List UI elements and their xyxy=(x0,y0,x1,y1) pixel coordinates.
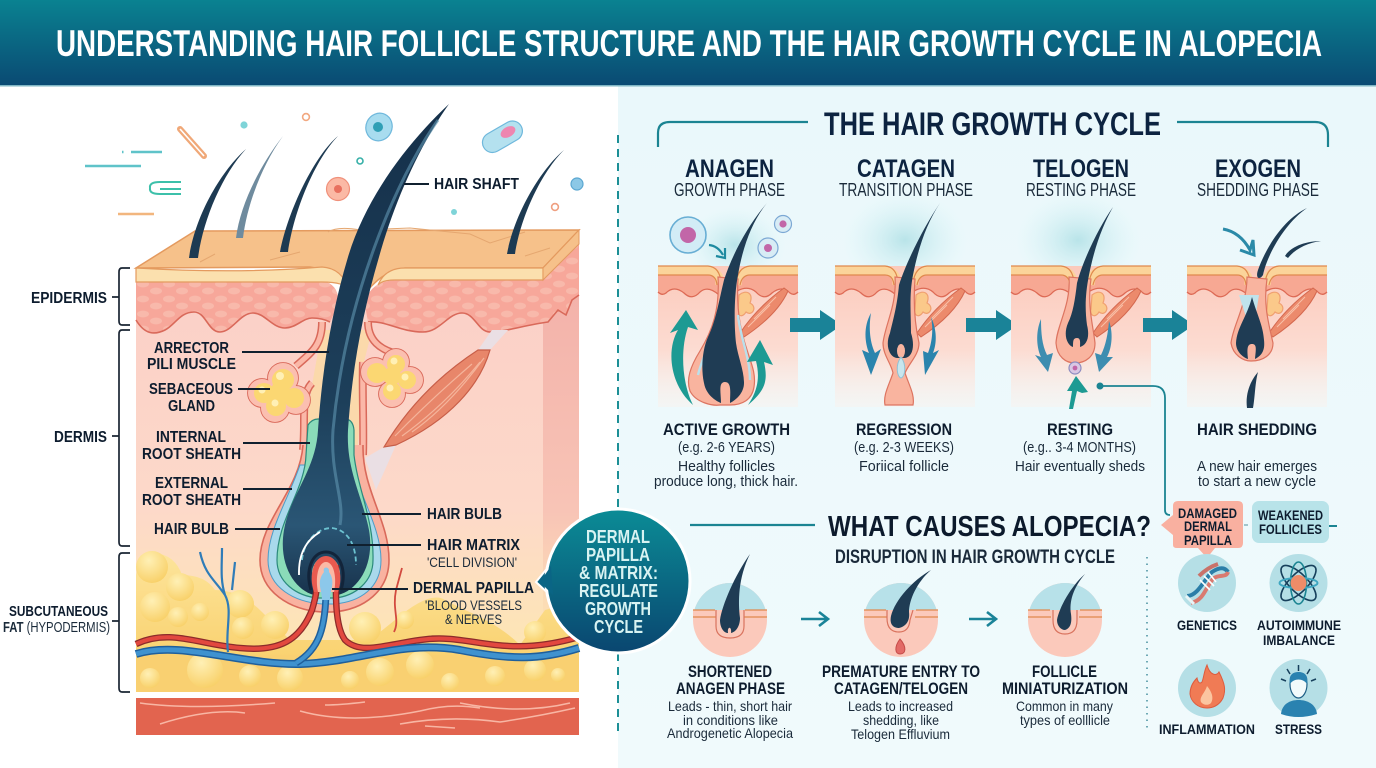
catagen caption xyxy=(854,420,954,475)
arrow: telogen to exogen xyxy=(1143,310,1194,340)
anagen skin diagram xyxy=(658,203,798,407)
caption: shedding, like xyxy=(863,712,939,728)
arrector pili muscle xyxy=(365,330,508,490)
callout: weakened follicles: WEAKENED xyxy=(1258,507,1323,523)
caption: CATAGEN/TELOGEN xyxy=(834,680,968,698)
anagen caption xyxy=(654,420,798,490)
callout: weakened follicles: FOLLICLES xyxy=(1259,521,1322,537)
label: sebaceous gland xyxy=(149,381,233,415)
follicle sheaths xyxy=(260,419,389,612)
caption: Common in many xyxy=(1016,698,1113,714)
exogen heading: SHEDDING PHASE xyxy=(1197,180,1319,200)
telogen heading xyxy=(1026,155,1136,200)
dermal papilla xyxy=(309,552,343,600)
callout: damaged dermal papilla: PAPILLA xyxy=(1184,532,1232,548)
catagen heading xyxy=(839,155,973,200)
main hair shaft and bulb xyxy=(283,104,449,595)
telogen caption: Hair eventually sheds xyxy=(1015,459,1145,475)
label xyxy=(1257,617,1341,648)
label: arrector pili muscle: ARRECTOR xyxy=(154,340,229,357)
blood vessels xyxy=(136,548,579,664)
label: internal root sheath: INTERNAL xyxy=(156,429,226,446)
label: internal root sheath: ROOT SHEATH xyxy=(142,446,241,463)
label: hair bulb right: HAIR BULB xyxy=(427,506,502,523)
label: sebaceous gland: SEBACEOUS xyxy=(149,381,233,398)
panel: hair follicle anatomy xyxy=(3,104,583,735)
catagen caption: REGRESSION xyxy=(856,420,952,439)
icon: miniaturized follicle xyxy=(1028,574,1102,657)
heading: what causes alopecia: WHAT CAUSES ALOPECIA? xyxy=(828,511,1151,543)
leader lines xyxy=(235,184,429,589)
arrow: anagen to catagen xyxy=(790,310,842,340)
factor: inflammation xyxy=(1159,659,1255,737)
telogen caption xyxy=(1015,420,1145,475)
anagen caption: Healthy follicles xyxy=(678,459,775,475)
catagen skin diagram xyxy=(835,203,975,407)
exogen heading: EXOGEN xyxy=(1215,155,1301,183)
factor: autoimmune imbalance xyxy=(1257,554,1341,648)
label: AUTOIMMUNE xyxy=(1257,617,1341,633)
caption: Telogen Effluvium xyxy=(851,726,950,742)
epidermis cell layer xyxy=(136,244,579,333)
label: STRESS xyxy=(1275,721,1322,737)
telogen caption: RESTING xyxy=(1047,420,1113,439)
callout: dermal papilla and matrix: REGULATE xyxy=(579,581,658,601)
caption: FOLLICLE xyxy=(1032,663,1097,681)
callout: dermal papilla and matrix xyxy=(536,509,690,653)
label: sebaceous gland: GLAND xyxy=(168,398,215,415)
phase: telogen xyxy=(1011,155,1151,475)
label: GENETICS xyxy=(1177,617,1237,633)
label: subcutaneous fat xyxy=(3,603,110,636)
icon: stressed person xyxy=(1270,659,1328,717)
caption: SHORTENED xyxy=(688,663,772,681)
telogen caption: (e.g.. 3-4 MONTHS) xyxy=(1023,439,1136,456)
catagen heading: TRANSITION PHASE xyxy=(839,180,973,200)
exogen caption: A new hair emerges xyxy=(1197,459,1317,475)
telogen skin diagram xyxy=(1011,207,1151,409)
callout: weakened follicles xyxy=(1252,501,1337,543)
label: subcutaneous fat: SUBCUTANEOUS xyxy=(9,603,108,620)
callout: dermal papilla and matrix: PAPILLA xyxy=(586,545,650,565)
factor: genetics xyxy=(1177,554,1237,633)
exogen caption: to start a new cycle xyxy=(1198,474,1316,490)
exogen heading xyxy=(1197,155,1319,200)
muscle base band xyxy=(136,698,579,735)
label: dermal papilla: DERMAL PAPILLA xyxy=(413,580,534,597)
icon: short hair follicle xyxy=(693,554,767,657)
title banner xyxy=(0,0,1376,86)
telogen heading: RESTING PHASE xyxy=(1026,180,1136,200)
label: external root sheath: ROOT SHEATH xyxy=(142,492,241,509)
label: subcutaneous fat: FAT (HYPODERMIS) xyxy=(3,619,110,636)
label: dermal papilla xyxy=(413,580,534,627)
heading: what causes alopecia: DISRUPTION IN HAIR GROWTH CYCLE xyxy=(835,547,1115,568)
phase: catagen xyxy=(835,155,975,475)
catagen caption: Foriical follicle xyxy=(859,459,949,475)
label: arrector pili muscle: PILI MUSCLE xyxy=(147,356,236,373)
caption xyxy=(667,663,793,741)
label: hair matrix: HAIR MATRIX xyxy=(427,537,520,554)
dermis layer xyxy=(136,300,579,650)
callout: dermal papilla and matrix: GROWTH xyxy=(585,599,651,619)
icon: DNA xyxy=(1178,554,1236,612)
anagen heading: ANAGEN xyxy=(685,155,774,183)
callout: damaged dermal papilla: DERMAL xyxy=(1184,518,1232,534)
caption: Androgenetic Alopecia xyxy=(667,725,793,741)
label: dermal papilla: 'BLOOD VESSELS xyxy=(425,597,522,613)
telogen heading: TELOGEN xyxy=(1033,155,1129,183)
label: epidermis: EPIDERMIS xyxy=(31,290,107,307)
phase: anagen xyxy=(654,155,798,490)
cause: shortened anagen phase xyxy=(667,554,793,741)
callout: damaged dermal papilla xyxy=(1161,501,1243,558)
caption: types of eolllicle xyxy=(1020,712,1110,728)
caption xyxy=(822,663,980,742)
anagen heading: GROWTH PHASE xyxy=(674,180,785,200)
catagen caption: (e.g. 2-3 WEEKS) xyxy=(854,439,954,456)
heading: the hair growth cycle: THE HAIR GROWTH CYCLE xyxy=(824,106,1161,142)
factor: stress xyxy=(1270,659,1328,737)
anagen heading xyxy=(674,155,785,200)
connector: telogen to damaged papilla xyxy=(1097,383,1170,515)
arrow: cause 1 to 2 xyxy=(801,612,828,626)
cause: follicle miniaturization xyxy=(1002,574,1128,728)
label: hair shaft: HAIR SHAFT xyxy=(434,176,519,193)
label: dermal papilla: & NERVES xyxy=(445,611,502,627)
caption: in conditions like xyxy=(683,712,778,728)
callout: dermal papilla and matrix: DERMAL xyxy=(586,527,650,547)
exogen shedding arrow xyxy=(1223,229,1254,255)
fat layer xyxy=(136,551,579,692)
glands and ducts xyxy=(248,322,423,455)
caption: Leads to increased xyxy=(848,698,953,714)
callout: dermal papilla and matrix: & MATRIX: xyxy=(579,563,658,583)
label: external root sheath xyxy=(142,475,241,509)
caption: MINIATURIZATION xyxy=(1002,680,1128,698)
small hairs xyxy=(189,136,564,258)
anagen caption: (e.g. 2-6 YEARS) xyxy=(678,439,775,456)
skin surface xyxy=(136,230,579,290)
label: hair matrix xyxy=(427,537,520,570)
label: internal root sheath xyxy=(142,429,241,463)
icon: atom xyxy=(1270,554,1328,612)
label: hair matrix: 'CELL DIVISION' xyxy=(427,554,517,570)
exogen caption: HAIR SHEDDING xyxy=(1197,420,1317,439)
caption: Leads - thin, short hair xyxy=(668,698,792,714)
arrow: cause 2 to 3 xyxy=(969,612,996,626)
arrow: catagen to telogen xyxy=(966,310,1018,340)
brackets xyxy=(112,268,130,692)
stem cell icons xyxy=(670,216,792,258)
exogen caption xyxy=(1197,420,1317,490)
caption xyxy=(1002,663,1128,728)
icon: follicle with droplet xyxy=(864,570,938,657)
icon: flame xyxy=(1178,659,1236,717)
label: IMBALANCE xyxy=(1263,632,1335,648)
callout: dermal papilla and matrix: CYCLE xyxy=(594,617,643,637)
label: INFLAMMATION xyxy=(1159,721,1255,737)
label: dermis: DERMIS xyxy=(54,429,107,446)
caption: PREMATURE ENTRY TO xyxy=(822,663,980,681)
anagen caption: ACTIVE GROWTH xyxy=(663,420,790,439)
label: external root sheath: EXTERNAL xyxy=(155,475,228,492)
cause: premature entry xyxy=(822,570,980,742)
panel: right background xyxy=(618,86,1376,768)
epidermis cream band xyxy=(136,230,579,290)
exogen skin diagram xyxy=(1187,208,1327,408)
heading: the hair growth cycle xyxy=(658,106,1328,147)
label: hair bulb left: HAIR BULB xyxy=(154,521,229,538)
callout: damaged dermal papilla: DAMAGED xyxy=(1178,505,1237,521)
heading: what causes alopecia xyxy=(690,511,1151,568)
caption: ANAGEN PHASE xyxy=(676,680,785,698)
label: arrector pili muscle xyxy=(147,340,236,373)
decorative cells and microbes xyxy=(85,109,583,215)
anagen caption: produce long, thick hair. xyxy=(654,474,798,490)
phase: exogen xyxy=(1187,155,1327,490)
catagen heading: CATAGEN xyxy=(857,155,955,183)
